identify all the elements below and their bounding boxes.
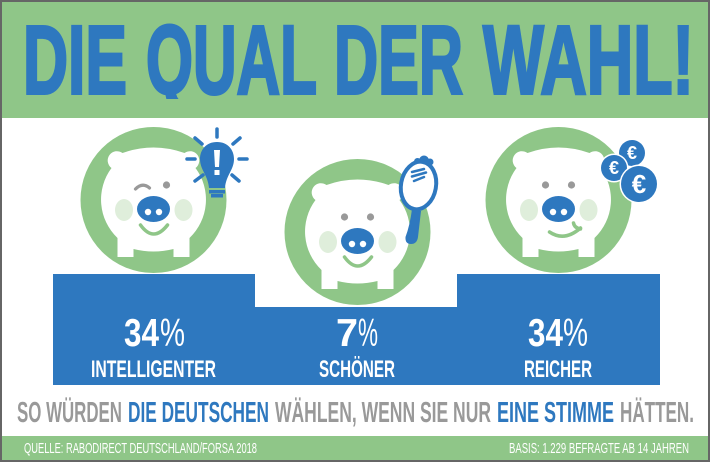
- stat: intelligenter: [91, 312, 216, 383]
- title: DER: [334, 6, 463, 114]
- title: [26, 24, 689, 99]
- stat: schöner: SCHÖNER: [319, 356, 395, 383]
- stat: reicher: 34: [528, 312, 563, 355]
- sentence: SO WÜRDEN: [17, 397, 122, 429]
- stat: schöner: [319, 312, 395, 383]
- pig: beautiful: [284, 159, 430, 305]
- stat: intelligenter: %: [160, 312, 185, 355]
- source: QUELLE: RABODIRECT DEUTSCHLAND/FORSA 2018: [24, 441, 257, 457]
- stat: intelligenter: 34: [124, 312, 159, 355]
- stat: reicher: REICHER: [524, 356, 592, 383]
- pig: intelligent: [80, 127, 226, 273]
- blue podium: [53, 274, 660, 385]
- sentence: DIE DEUTSCHEN: [128, 397, 269, 429]
- icon: euro coins: €: [627, 143, 637, 163]
- stat: intelligenter: INTELLIGENTER: [91, 356, 216, 383]
- title: QUAL: [146, 6, 317, 114]
- header band: [2, 2, 708, 118]
- icon: euro coins: [600, 140, 658, 204]
- icon: hand mirror: [397, 156, 440, 244]
- stat: reicher: [524, 312, 592, 383]
- sentence: [17, 397, 694, 429]
- sentence: EINE STIMME: [497, 397, 614, 429]
- icon: euro coins: €: [609, 158, 619, 178]
- icon: light bulb: [187, 129, 247, 198]
- footer band: [2, 436, 708, 460]
- sentence: WÄHLEN, WENN SIE NUR: [275, 397, 491, 429]
- icon: euro coins: €: [632, 169, 646, 199]
- stat: schöner: %: [358, 312, 378, 355]
- stat: reicher: %: [563, 312, 588, 355]
- stat: schöner: 7: [336, 312, 358, 355]
- pig: rich: [486, 127, 632, 273]
- title: DIE: [23, 6, 127, 114]
